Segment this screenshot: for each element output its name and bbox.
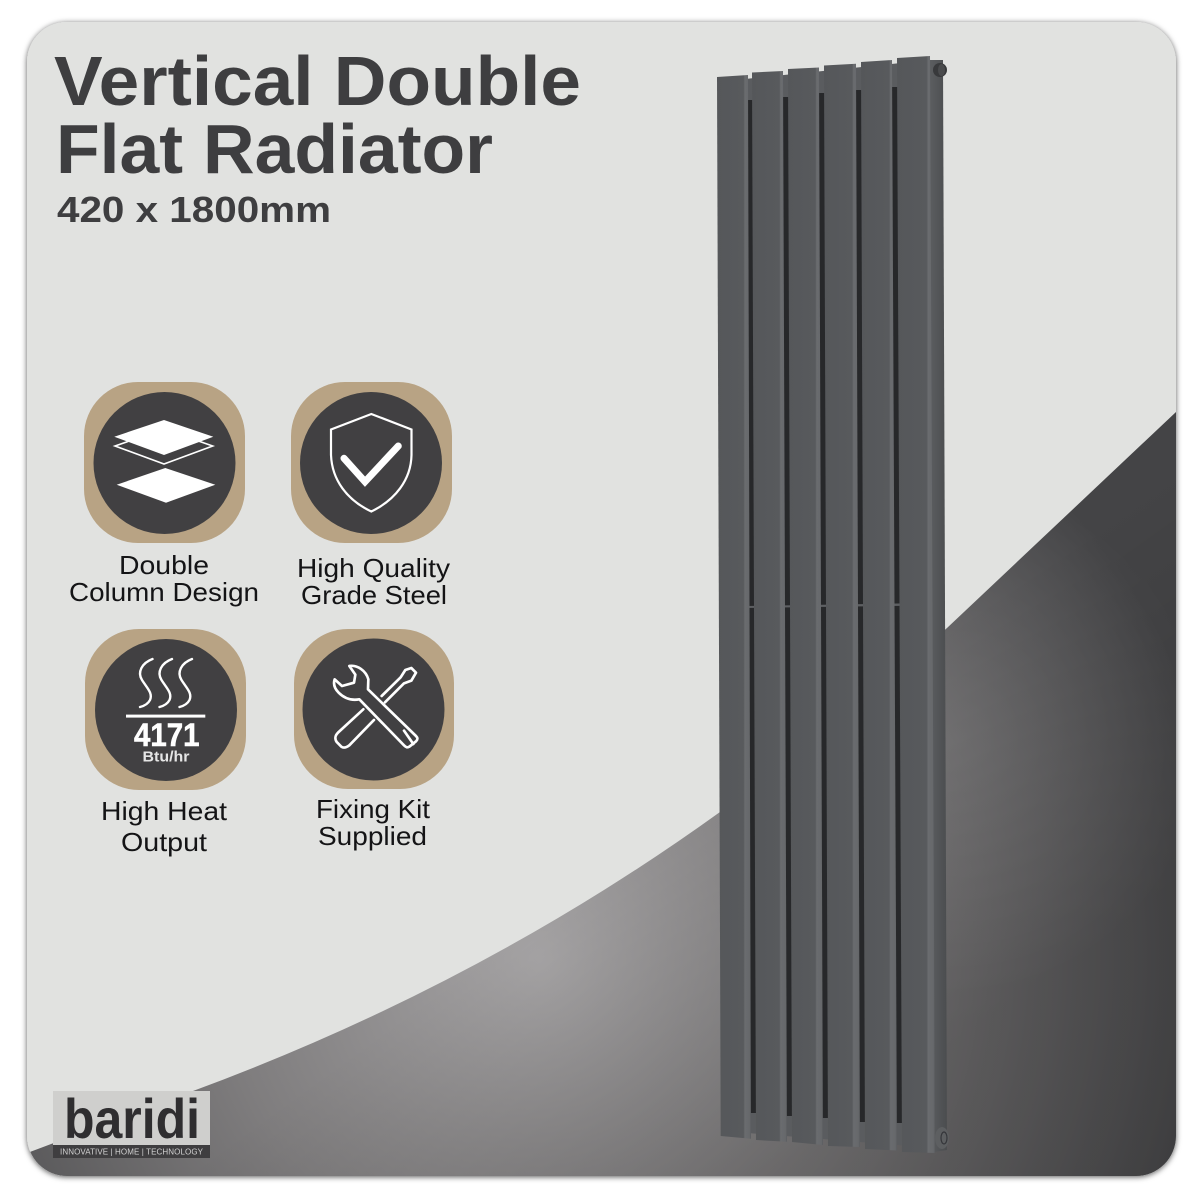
label: High Heat	[101, 796, 228, 826]
label: Column Design	[69, 577, 259, 607]
label	[316, 794, 431, 851]
label: Fixing Kit	[316, 794, 431, 824]
dark curved background swoosh	[27, 412, 1176, 1176]
feature: high quality grade steel	[291, 382, 452, 610]
label: Grade Steel	[301, 580, 447, 610]
bottom valve	[935, 1127, 949, 1149]
feature: fixing kit supplied	[294, 629, 454, 851]
subtitle: dimensions: 420 x 1800mm	[57, 189, 331, 230]
label: High Quality	[297, 553, 450, 583]
icon: layered sheets	[84, 382, 245, 543]
title	[54, 42, 581, 188]
icon: heat waves 4171 Btu/hr: 4171	[134, 717, 200, 753]
column panels	[717, 56, 935, 1153]
feature: high heat output	[85, 629, 246, 857]
title: Vertical Double	[54, 42, 581, 120]
logo: baridi: baridi	[64, 1087, 200, 1150]
icon: heat waves 4171 Btu/hr: Btu/hr	[142, 748, 190, 766]
label	[297, 553, 450, 610]
rear rail and manifold	[745, 60, 935, 1148]
label: Output	[121, 827, 208, 857]
product: anthracite vertical radiator	[717, 56, 949, 1153]
icon: shield with check	[291, 382, 452, 543]
top valve	[933, 63, 947, 77]
label	[101, 796, 228, 857]
feature: double column design	[69, 382, 259, 607]
title: Flat Radiator	[56, 110, 493, 188]
gaps between columns	[747, 87, 902, 1123]
icon: heat waves 4171 Btu/hr	[85, 629, 246, 790]
label	[69, 550, 259, 607]
connector rail	[745, 603, 930, 608]
icon: wrench and screwdriver	[294, 629, 454, 789]
label: Double	[119, 550, 209, 580]
label: Supplied	[318, 821, 427, 851]
logo: baridi: INNOVATIVE | HOME | TECHNOLOGY	[60, 1148, 204, 1156]
